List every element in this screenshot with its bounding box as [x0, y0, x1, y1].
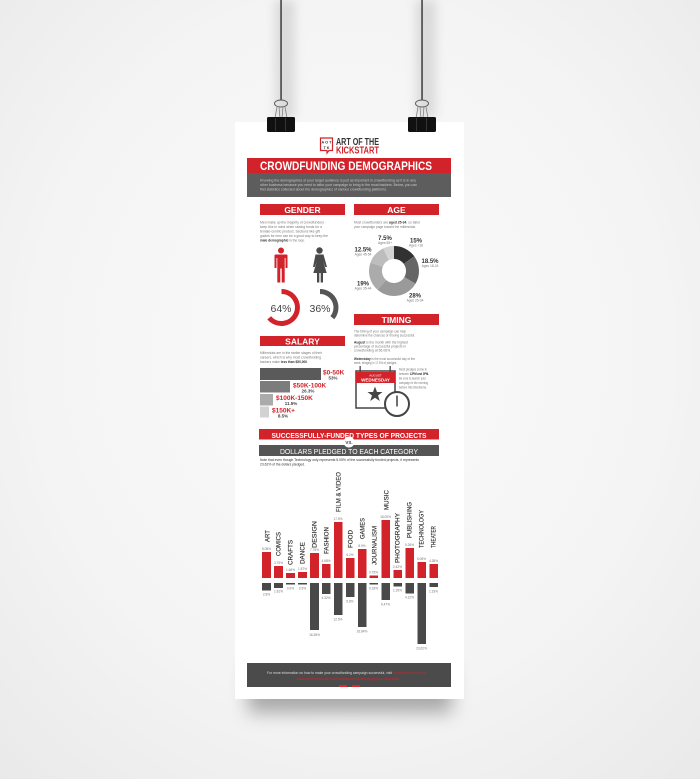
salary labels	[272, 370, 345, 414]
logo: T K	[323, 146, 330, 150]
hanging strings	[280, 0, 423, 100]
gender text: Men make up the majority of crowdfunders -	[260, 220, 326, 224]
category labels	[264, 472, 438, 565]
pledged values: 0.9%	[287, 586, 294, 590]
funded values: 8.08%	[262, 547, 271, 551]
age labels	[354, 236, 439, 302]
funded values: 4.68%	[321, 559, 331, 563]
age labels: 7.5%	[378, 236, 392, 242]
vs badge: VS.	[345, 440, 353, 445]
funded values: 5.05%	[417, 557, 426, 561]
pledged values: 6.47%	[381, 602, 390, 606]
icon: man	[275, 248, 288, 282]
intro panel	[247, 173, 451, 197]
age labels: Ages 18-24	[422, 264, 439, 268]
category labels: PUBLISHING	[406, 502, 414, 538]
panel: salary	[260, 336, 345, 418]
bar chart: dollars pledged	[262, 583, 438, 644]
category labels: FILM & VIDEO	[336, 472, 342, 512]
category labels: GAMES	[360, 517, 366, 539]
age labels: Ages 55+	[378, 241, 392, 245]
age text: Most crowdfunders are aged 25-34, so tailor	[354, 220, 420, 224]
footer: www.artofthekickstart.com/crowdfunding-demographics-infographic	[297, 677, 400, 681]
pledged values: 5.8%	[346, 600, 354, 604]
salary labels: $100K-150K	[276, 395, 313, 402]
timing text: August is the month with the highest	[354, 340, 408, 344]
salary text: backers make less than $50,000.	[260, 360, 308, 364]
icon: calendar	[356, 366, 395, 408]
timing callout: Most pledges come in	[399, 368, 427, 372]
vs badge	[344, 436, 354, 448]
footer: For more information on how to make your crowdfunding campaign successful, visit	[267, 671, 392, 675]
chart note: Note that even though Technology only represents 5.05% of the successfully funded projects, it represents	[260, 458, 419, 462]
category labels: TECHNOLOGY	[418, 509, 426, 548]
gender text: keep this in mind when raising funds for a	[260, 225, 322, 229]
salary labels: $0-50K	[323, 370, 345, 376]
age labels: 12.5%	[354, 248, 372, 254]
funded values: 1.66%	[286, 568, 295, 572]
timing callout: before this timeframe.	[399, 386, 427, 390]
gender text: male demographic in the loop.	[260, 238, 305, 242]
icon: clock	[385, 392, 409, 416]
age labels: Ages 45-54	[355, 252, 372, 256]
age labels: 19%	[357, 282, 370, 288]
gender text: female-centric product. Sections like gift	[260, 230, 320, 234]
funded values: 3.75%	[274, 561, 283, 565]
timing callout: Be sure to launch your	[399, 376, 427, 380]
funded values: 2.42%	[393, 565, 402, 569]
pledged values: 0.33%	[369, 586, 378, 590]
timing text: The timing of your campaign can help	[354, 330, 406, 334]
funded values: 1.87%	[298, 567, 307, 571]
pledged values: 4.12%	[405, 596, 414, 600]
salary percentages: 8.5%	[278, 414, 288, 418]
age labels: Ages 25-34	[407, 298, 424, 302]
salary text: careers, which is why most crowdfunding	[260, 356, 321, 360]
donut: 64 percent male: 64%	[270, 303, 292, 315]
logo: ART OF THE	[336, 137, 379, 148]
salary text: Millennials are in the earlier stages of their	[260, 351, 323, 355]
logo: A O T	[322, 140, 332, 144]
timing callout: campaign in the morning	[399, 381, 428, 385]
age text: your campaign page toward the millennials.	[354, 225, 416, 229]
panel: timing	[354, 314, 439, 416]
pledged values	[263, 586, 438, 650]
category labels: DANCE	[300, 541, 306, 564]
category labels: THEATER	[430, 526, 438, 548]
category labels: PHOTOGRAPHY	[394, 512, 402, 563]
funded values: 18.05%	[380, 515, 391, 519]
pledged values: 0.5%	[299, 586, 306, 590]
panel: age	[354, 204, 439, 302]
timing text: Wednesday is the most successful day of the	[354, 357, 419, 361]
salary percentages: 53%	[328, 376, 338, 380]
intro panel: find statistics collected about the demographics of various crowdfunding platforms.	[260, 188, 387, 192]
category labels: COMICS	[276, 531, 282, 556]
logo: KICKSTART	[336, 146, 379, 156]
category labels: ART	[264, 530, 272, 542]
category labels: CRAFTS	[288, 539, 294, 565]
funded values: 17.5%	[333, 517, 343, 521]
pledged values: 16.38%	[309, 633, 320, 637]
icon: calendar: AUGUST	[369, 374, 382, 378]
salary percentages: 11.5%	[285, 401, 297, 406]
salary heading: SALARY	[285, 336, 320, 346]
age labels: 15%	[410, 238, 423, 244]
age labels: 18.5%	[421, 259, 439, 265]
poster sheet	[235, 122, 464, 699]
logo	[320, 137, 379, 156]
timing text: percentage of successful projects in	[354, 344, 406, 348]
funded values: 9.26%	[405, 543, 414, 547]
salary percentages: 26.3%	[302, 388, 314, 394]
heading: dollars pledged	[259, 445, 439, 456]
salary bars	[260, 368, 321, 418]
timing heading: TIMING	[382, 315, 412, 325]
pledged values: 1.33%	[429, 590, 438, 594]
category labels: JOURNALISM	[372, 526, 378, 565]
binder clip left	[267, 100, 295, 132]
pledged values: 4.32%	[321, 596, 331, 600]
salary percentages	[278, 376, 338, 418]
title banner: CROWDFUNDING DEMOGRAPHICS	[260, 161, 432, 173]
icon: woman	[313, 247, 327, 282]
category labels: FASHION	[324, 527, 330, 554]
category labels: MUSIC	[384, 490, 390, 510]
donut: 36 percent female: 36%	[309, 303, 331, 315]
bar chart: funded projects	[262, 520, 438, 578]
icon: calendar: WEDNESDAY	[361, 378, 390, 382]
heading: successfully-funded projects: SUCCESSFULLY-FUNDED TYPES OF PROJECTS	[272, 431, 426, 440]
category labels: DESIGN	[312, 521, 318, 548]
donut chart: age	[375, 252, 413, 289]
pledged values: 1.81%	[274, 590, 283, 594]
timing text: crowdfunding at 56.06%.	[354, 348, 391, 352]
salary labels: $50K-100K	[293, 382, 327, 390]
age labels: Ages +18	[409, 244, 423, 248]
pledged values: 23.62%	[416, 646, 427, 650]
funded values: 4.38%	[429, 559, 438, 563]
timing text: week, bringing in 17.5% of pledges.	[354, 361, 397, 365]
timing text: determine the chances of it being successful.	[354, 334, 415, 338]
funded values: 6.2%	[346, 553, 354, 557]
funded values	[262, 515, 438, 574]
funded values: 0.75%	[369, 570, 378, 574]
age labels: Ages 35-44	[355, 286, 372, 290]
footer: artofthekickstart.com	[393, 671, 426, 675]
gender heading: GENDER	[284, 205, 321, 215]
age heading: AGE	[387, 205, 406, 215]
age labels: 28%	[409, 294, 422, 300]
binder clip right	[408, 100, 436, 132]
intro panel: Knowing the demographics of your target audience is just as important in crowdfunding as it is in any	[260, 178, 416, 182]
panel: gender	[260, 204, 345, 323]
intro panel: other business because you need to tailor your campaign to bring in the most backers. Below, you can	[260, 183, 417, 187]
chart note: 23.62% of the dollars pledged.	[260, 462, 305, 466]
footer	[247, 663, 451, 687]
pledged values: 16.84%	[357, 630, 368, 634]
pledged values: 2.8%	[263, 592, 270, 596]
pledged values: 1.29%	[393, 588, 402, 592]
salary labels: $150K+	[272, 408, 295, 414]
funded values: 7.75%	[310, 548, 319, 552]
timing callout: between 12PM and 3PM.	[399, 372, 434, 376]
gender text: guides for men can be a good way to keep the	[260, 234, 328, 238]
category labels: FOOD	[348, 530, 354, 548]
pledged values: 12.5%	[333, 618, 343, 622]
heading: dollars pledged: DOLLARS PLEDGED TO EACH CATEGORY	[280, 447, 418, 456]
funded values: 8.9%	[358, 544, 366, 548]
